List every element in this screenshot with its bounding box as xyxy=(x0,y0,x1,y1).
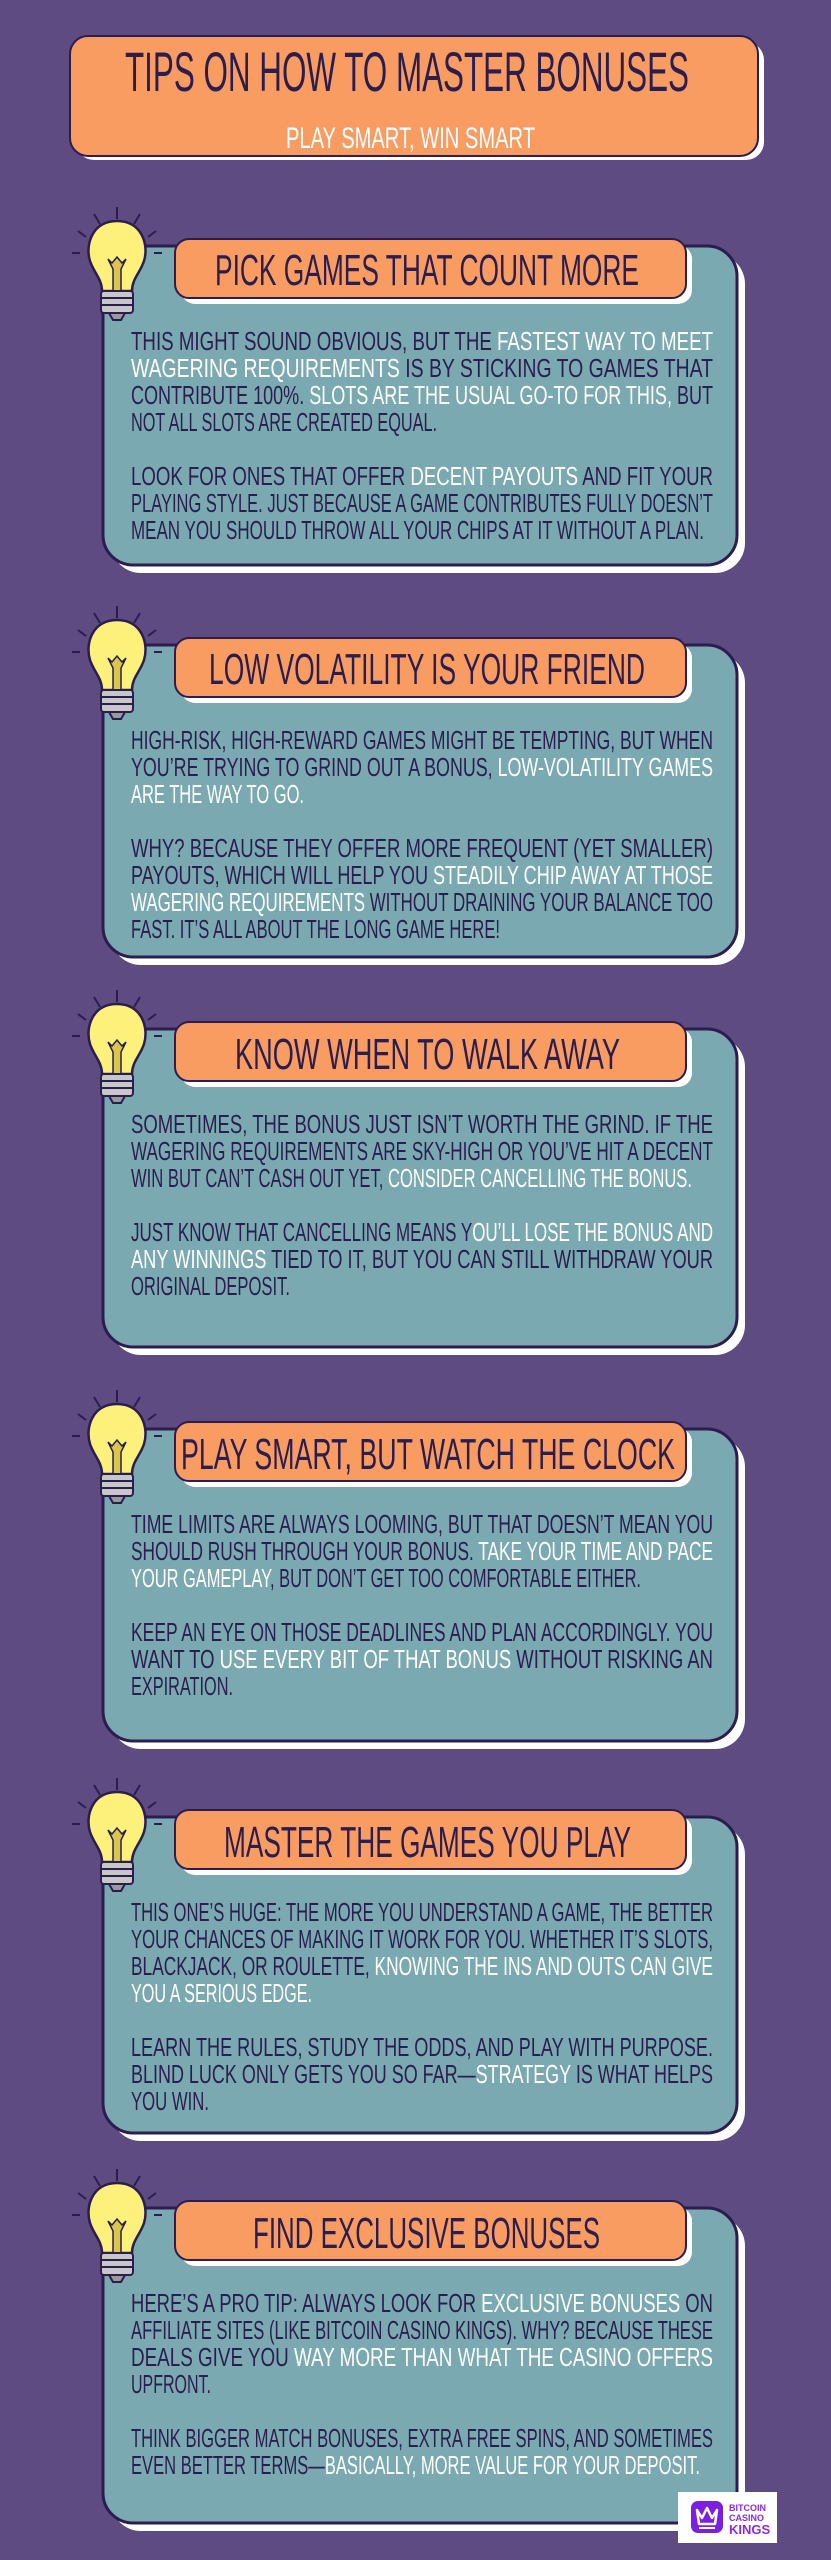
body text: CONTRIBUTE 100%. SLOTS ARE THE USUAL GO-TO FOR THIS, BUT xyxy=(131,380,713,410)
body text: WAGERING REQUIREMENTS IS BY STICKING TO GAMES THAT xyxy=(131,353,713,383)
logo: bitcoin casino kings: KINGS xyxy=(729,2522,770,2537)
body text xyxy=(131,1109,713,1301)
body text: UPFRONT. xyxy=(131,2369,211,2399)
body text: THIS MIGHT SOUND OBVIOUS, BUT THE FASTEST WAY TO MEET xyxy=(131,326,713,356)
heading box xyxy=(175,638,692,703)
heading box: FIND EXCLUSIVE BONUSES xyxy=(253,2209,600,2258)
logo: bitcoin casino kings: CASINO xyxy=(729,2513,764,2523)
heading box xyxy=(175,1422,692,1487)
body text xyxy=(131,1509,713,1701)
icon: light bulb xyxy=(72,2169,162,2282)
body text: SHOULD RUSH THROUGH YOUR BONUS. TAKE YOUR TIME AND PACE xyxy=(131,1536,713,1566)
icon: light bulb xyxy=(72,990,162,1103)
icon: light bulb xyxy=(72,1390,162,1503)
body text: ARE THE WAY TO GO. xyxy=(131,779,304,809)
body text: YOU’RE TRYING TO GRIND OUT A BONUS, LOW-VOLATILITY GAMES xyxy=(131,752,713,782)
body text: ORIGINAL DEPOSIT. xyxy=(131,1271,290,1301)
heading box xyxy=(175,1810,692,1875)
subtitle: PLAY SMART, WIN SMART xyxy=(286,122,535,155)
body text: BLIND LUCK ONLY GETS YOU SO FAR—STRATEGY IS WHAT HELPS xyxy=(131,2059,713,2089)
body text: NOT ALL SLOTS ARE CREATED EQUAL. xyxy=(131,407,437,437)
panel: pick games that count more xyxy=(72,207,745,573)
logo: bitcoin casino kings xyxy=(678,2492,777,2543)
body text: YOU A SERIOUS EDGE. xyxy=(131,1978,312,2008)
body text: HERE’S A PRO TIP: ALWAYS LOOK FOR EXCLUSIVE BONUSES ON xyxy=(131,2288,713,2318)
panel: find exclusive bonuses xyxy=(72,2169,745,2531)
body text: JUST KNOW THAT CANCELLING MEANS YOU’LL LOSE THE BONUS AND xyxy=(131,1217,713,1247)
heading box xyxy=(175,239,692,304)
body text: WANT TO USE EVERY BIT OF THAT BONUS WITHOUT RISKING AN xyxy=(131,1644,713,1674)
icon: light bulb xyxy=(72,1778,162,1891)
body text: PAYOUTS, WHICH WILL HELP YOU STEADILY CHIP AWAY AT THOSE xyxy=(131,860,713,890)
body text xyxy=(131,2288,713,2480)
panel: play smart, but watch the clock xyxy=(72,1390,745,1749)
panel: low volatility xyxy=(72,606,745,965)
logo: bitcoin casino kings: BITCOIN xyxy=(729,2503,766,2513)
body text xyxy=(131,1897,713,2116)
body text: FAST. IT’S ALL ABOUT THE LONG GAME HERE! xyxy=(131,914,500,944)
heading box xyxy=(175,1022,692,1087)
panel: master the games you play xyxy=(72,1778,745,2141)
body text xyxy=(131,725,713,944)
body text: EXPIRATION. xyxy=(131,1671,233,1701)
body text xyxy=(131,326,713,545)
icon: light bulb xyxy=(72,606,162,719)
body text: LOOK FOR ONES THAT OFFER DECENT PAYOUTS AND FIT YOUR xyxy=(131,461,713,491)
heading box xyxy=(175,2201,692,2266)
body text: YOU WIN. xyxy=(131,2086,209,2116)
panel: know when to walk away xyxy=(72,990,745,1355)
header xyxy=(70,36,764,160)
icon: light bulb xyxy=(72,207,162,320)
